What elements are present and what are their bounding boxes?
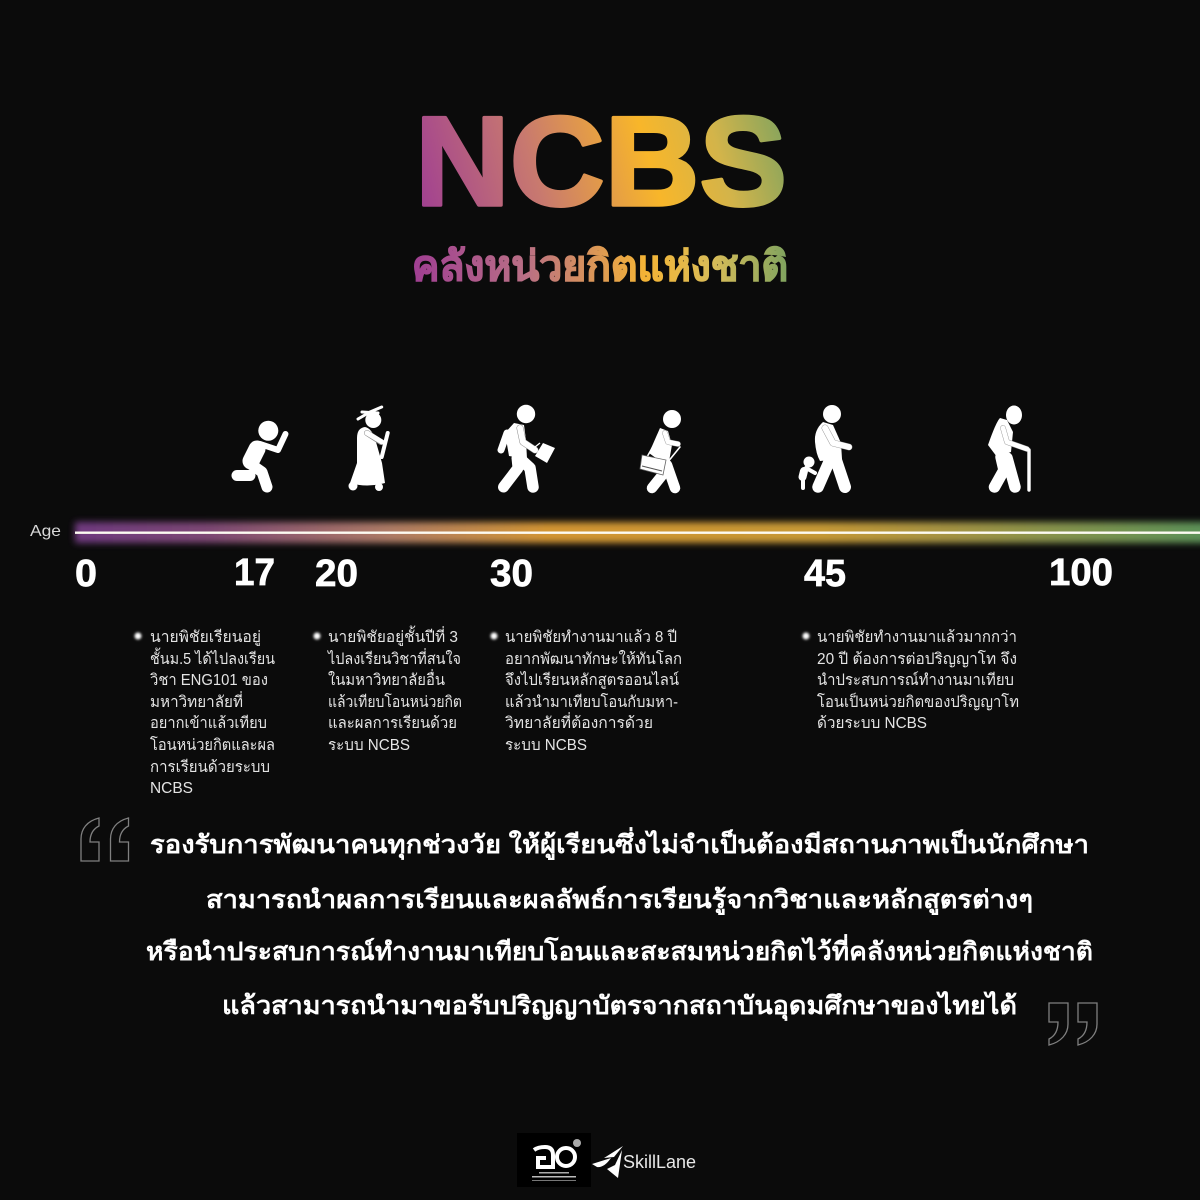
icon: walking with shoulder bag bbox=[640, 410, 681, 488]
age numbers: 45 bbox=[804, 553, 846, 595]
text block: age 45: นายพิชัยทำงานมาแล้วมากกว่า bbox=[817, 629, 1017, 646]
text block: age 20: ในมหาวิทยาลัยอื่น bbox=[328, 669, 445, 689]
text block: age 45: นำประสบการณ์ทำงานมาเทียบ bbox=[817, 671, 1014, 689]
age numbers: 100 bbox=[1049, 552, 1113, 594]
icon: kneeling student bbox=[237, 421, 286, 487]
text block: age 45: 20 ปี ต้องการต่อปริญญาโท จึง bbox=[817, 650, 1017, 668]
age numbers: 17 bbox=[234, 552, 275, 594]
text block: age 20: ระบบ NCBS bbox=[328, 737, 410, 754]
text block: age 30: จึงไปเรียนหลักสูตรออนไลน์ bbox=[505, 671, 679, 690]
icon: closing quote mark bbox=[1049, 1003, 1097, 1045]
text block: age 17: วิชา ENG101 ของ bbox=[150, 672, 268, 689]
icon: graduate in gown bbox=[348, 407, 388, 491]
logo: government agency bbox=[517, 1133, 591, 1187]
text block: age 30: วิทยาลัยที่ต้องการด้วย bbox=[505, 712, 653, 732]
text block: age 17 bbox=[134, 629, 275, 797]
quote text: รองรับการพัฒนาคนทุกช่วงวัย ให้ผู้เรียนซึ่งไม่จำเป็นต้องมีสถานภาพเป็นนักศึกษา bbox=[150, 827, 1089, 861]
text block: age 30: นายพิชัยทำงานมาแล้ว 8 ปี bbox=[505, 629, 677, 646]
quote text: แล้วสามารถนำมาขอรับปริญญาบัตรจากสถาบันอุดมศึกษาของไทยได้ bbox=[222, 990, 1017, 1022]
text block: age 45: ด้วยระบบ NCBS bbox=[817, 715, 927, 732]
logo: SkillLane: SkillLane bbox=[623, 1152, 696, 1172]
age numbers: 0 bbox=[75, 553, 97, 595]
text block: age 17: การเรียนด้วยระบบ bbox=[150, 759, 270, 776]
text block: age 17: มหาวิทยาลัยที่ bbox=[150, 691, 243, 711]
text block: age 45: โอนเป็นหน่วยกิตของปริญญาโท bbox=[817, 692, 1019, 711]
text block: age 30: อยากพัฒนาทักษะให้ทันโลก bbox=[505, 650, 682, 668]
quote text bbox=[146, 827, 1093, 1022]
text block: age 20: แล้วเทียบโอนหน่วยกิต bbox=[328, 693, 462, 711]
age label: Age bbox=[30, 523, 61, 540]
quote text: สามารถนำผลการเรียนและผลลัพธ์การเรียนรู้จากวิชาและหลักสูตรต่างๆ bbox=[206, 885, 1033, 916]
text block: age 17: โอนหน่วยกิตและผล bbox=[150, 736, 275, 754]
text block: age 17: อยากเข้าแล้วเทียบ bbox=[150, 715, 267, 732]
text block: age 20: ไปลงเรียนวิชาที่สนใจ bbox=[326, 648, 461, 668]
icon: opening quote mark bbox=[81, 818, 128, 861]
text block: age 30: ระบบ NCBS bbox=[505, 737, 587, 754]
logo: SkillLane bbox=[592, 1146, 696, 1178]
icon: parent with child bbox=[802, 405, 849, 488]
title: NCBS: NCBS bbox=[415, 90, 787, 232]
text block: age 30: แล้วนำมาเทียบโอนกับมหา- bbox=[505, 693, 678, 711]
age numbers: 30 bbox=[490, 553, 533, 595]
icon: walking with briefcase bbox=[501, 405, 555, 487]
text block: age 20 bbox=[314, 625, 462, 754]
text block: age 17: ชั้นม.5 ได้ไปลงเรียน bbox=[150, 647, 275, 668]
subtitle: คลังหน่วยกิตแห่งชาติ bbox=[412, 243, 788, 289]
text block: age 17: NCBS bbox=[150, 780, 193, 797]
icon: elderly with cane bbox=[988, 406, 1029, 490]
text block: age 30 bbox=[490, 629, 682, 754]
age numbers bbox=[75, 552, 1113, 595]
quote text: หรือนำประสบการณ์ทำงานมาเทียบโอนและสะสมหน่วยกิตไว้ที่คลังหน่วยกิตแห่งชาติ bbox=[146, 934, 1093, 966]
text block: age 20: นายพิชัยอยู่ชั้นปีที่ 3 bbox=[328, 625, 458, 647]
age numbers: 20 bbox=[315, 553, 358, 595]
text block: age 20: และผลการเรียนด้วย bbox=[328, 715, 457, 732]
timeline bar bbox=[75, 522, 1200, 543]
text block: age 45 bbox=[802, 629, 1019, 732]
text block: age 17: นายพิชัยเรียนอยู่ bbox=[150, 629, 261, 647]
